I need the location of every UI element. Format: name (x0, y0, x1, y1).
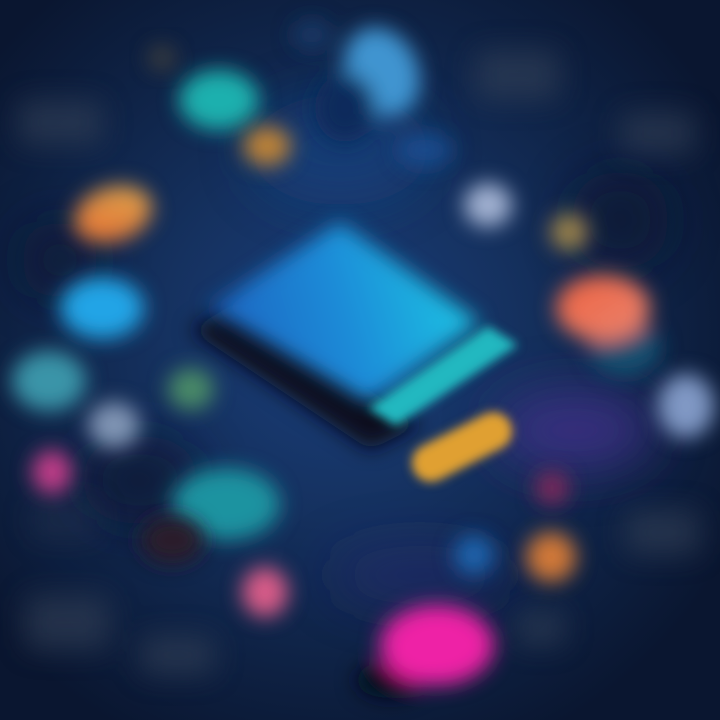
icon: magenta dot left (32, 450, 72, 494)
icon: orange dot bottom right (526, 532, 576, 582)
device (208, 222, 518, 426)
icon: blue dot bottom right (454, 535, 494, 575)
icon: faint dot top (147, 44, 177, 72)
icon: pale dot upper right (464, 183, 512, 227)
dark patches around the icons (20, 170, 670, 525)
icon: teal-blue oval far left (12, 351, 86, 411)
icon: pink dot bottom (242, 567, 288, 617)
device screen (208, 222, 480, 402)
icon: coral card right (556, 275, 661, 376)
icon: top blue crescent (292, 15, 453, 168)
icon: yellow pill under device (405, 406, 519, 488)
icon: blue oval left (60, 277, 144, 339)
icon: pale blue dot left (88, 402, 140, 448)
icon: orange pill left (67, 176, 159, 252)
icon: pale blue dot far right (658, 374, 714, 438)
icon: green dot left (168, 368, 214, 410)
purple glow lower right (250, 95, 655, 605)
icon: teal oval top (179, 70, 259, 130)
device shadow (190, 300, 420, 450)
icon: small orange top (243, 126, 291, 166)
icon: dark red shape bottom left (140, 516, 204, 564)
icon: teal oval bottom (172, 468, 280, 540)
icon: red dot right (535, 471, 569, 505)
icon: tan dot upper right (550, 213, 588, 251)
device teal edge (368, 326, 518, 426)
icon: magenta oval bottom (356, 605, 494, 698)
